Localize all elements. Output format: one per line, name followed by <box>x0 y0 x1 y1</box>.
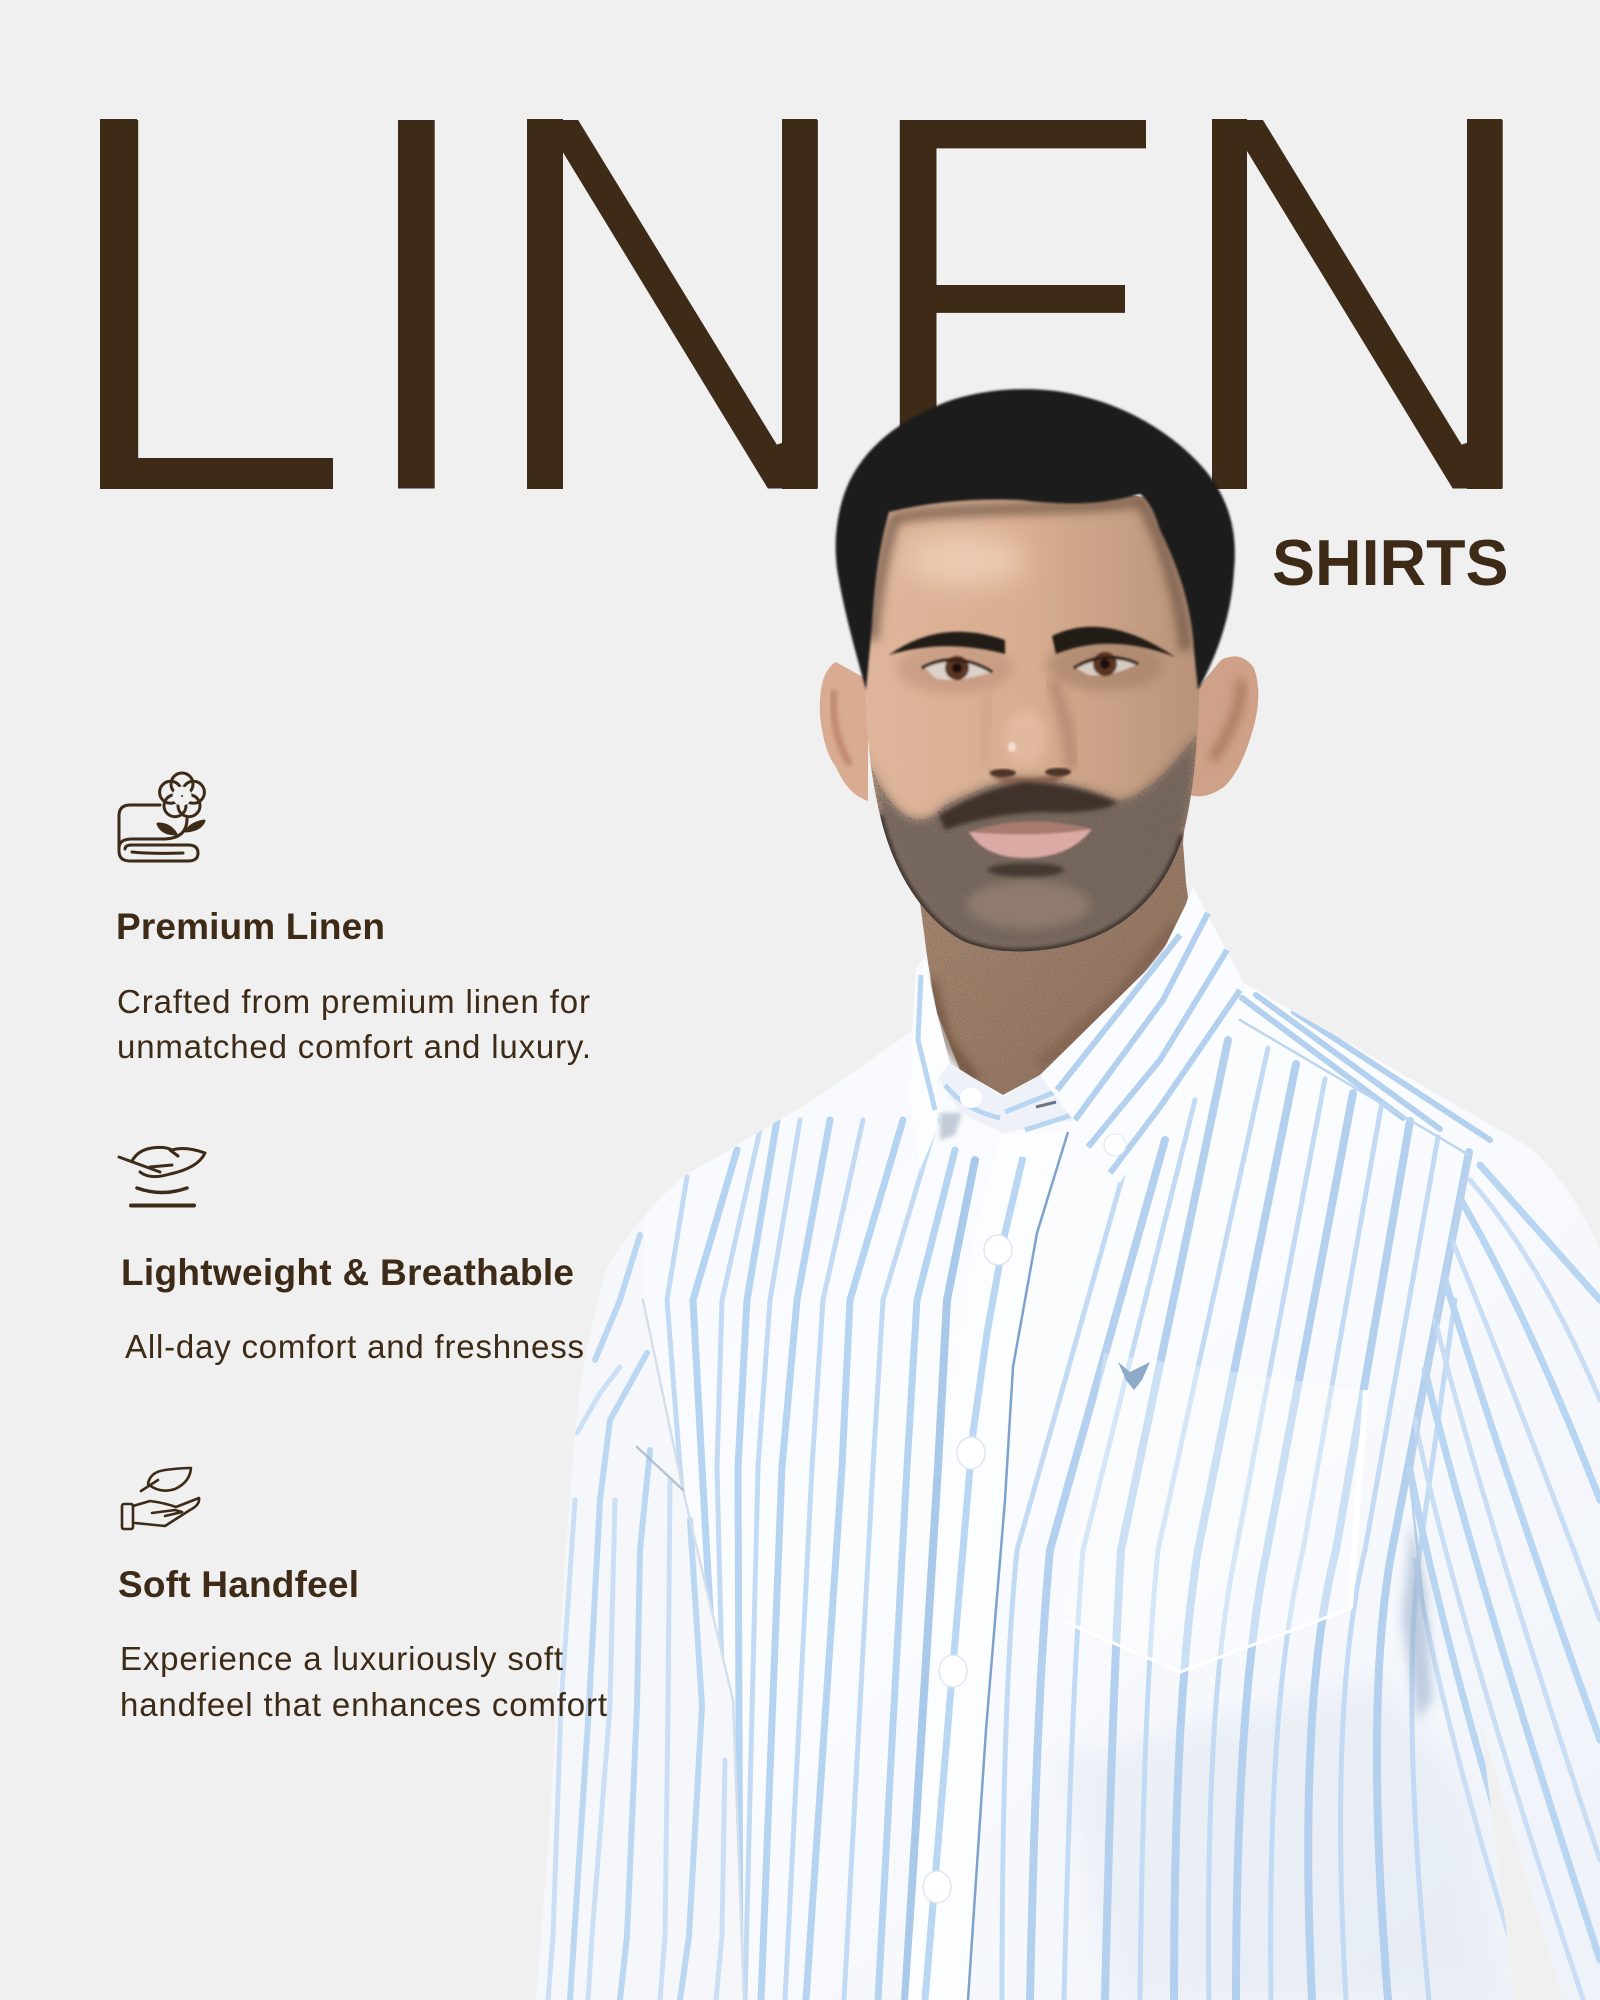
eye socket shading <box>897 642 1013 694</box>
collar left leaf <box>910 960 950 1170</box>
buttons <box>923 1235 1012 1903</box>
collar shadow <box>940 1113 962 1140</box>
body stripes right <box>1030 1040 1469 2000</box>
description: Crafted from premium linen for <box>117 983 590 1020</box>
icon: hand with leaf <box>122 1468 199 1529</box>
left sleeve <box>536 1215 744 2000</box>
subtitle: SHIRTS: SHIRTS <box>1272 527 1509 599</box>
beard <box>866 735 1196 951</box>
neck <box>917 790 1188 1095</box>
collar <box>910 887 1242 1183</box>
lips <box>969 821 1092 858</box>
feature: soft handfeel <box>118 1468 607 1723</box>
feature: premium linen: unmatched comfort and luxury. <box>117 1028 591 1065</box>
hair <box>836 389 1235 690</box>
heading: Lightweight & Breathable <box>121 1252 574 1293</box>
icon: folded cloth with flower <box>119 773 204 861</box>
heading: Soft Handfeel <box>118 1564 359 1605</box>
forehead highlight <box>905 534 1025 586</box>
background gap under right arm <box>1480 1720 1563 2000</box>
shirt <box>536 887 1600 2000</box>
heading: Premium Linen <box>116 906 385 947</box>
eyebrows <box>889 627 1175 657</box>
left eye <box>922 656 992 680</box>
pocket <box>1063 1353 1368 1672</box>
photo: man in striped linen shirt <box>116 389 1600 2000</box>
description: All-day comfort and freshness <box>125 1328 584 1365</box>
feature: lightweight and breathable <box>119 1147 584 1365</box>
body stripes left <box>693 1120 975 2000</box>
collar right leaf <box>1040 887 1242 1183</box>
moustache <box>939 782 1118 830</box>
title: LINEN: LINEN <box>50 0 1553 614</box>
feature: premium linen <box>116 773 591 1065</box>
logo <box>1118 1362 1150 1390</box>
description: Experience a luxuriously soft <box>120 1640 563 1677</box>
placket <box>908 1132 1068 2000</box>
seams <box>1240 1020 1469 1155</box>
face <box>836 389 1235 951</box>
armhole shadow <box>1402 1520 1432 1720</box>
right eye <box>1074 652 1138 676</box>
nose <box>982 680 1072 786</box>
hairline shadow <box>872 500 1186 650</box>
collar band <box>938 1063 1073 1133</box>
ears <box>820 656 1258 801</box>
right sleeve stripes <box>1410 1165 1600 2000</box>
icon: feather <box>119 1147 205 1206</box>
feature: soft handfeel: handfeel that enhances comfort <box>120 1686 607 1723</box>
yoke stripes <box>1242 995 1490 1140</box>
